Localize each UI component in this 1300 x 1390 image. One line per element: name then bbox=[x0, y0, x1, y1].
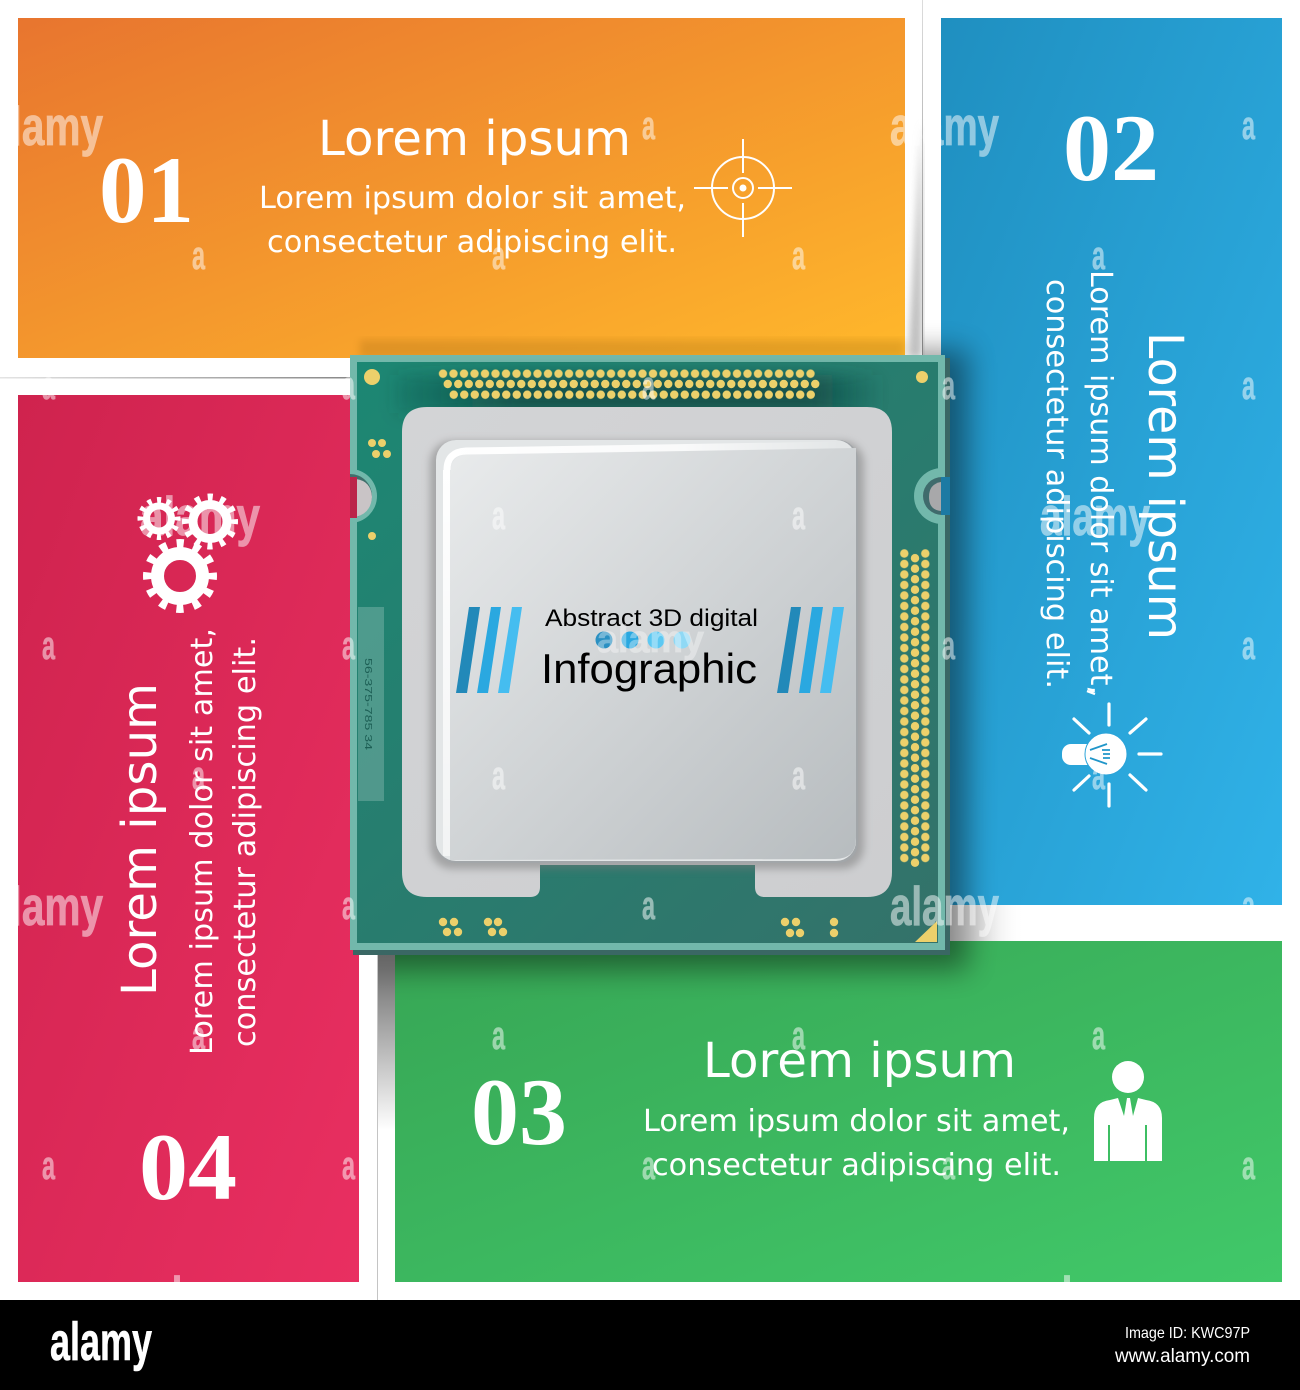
white sheet behind pink panel bbox=[0, 378, 377, 1300]
website: www.alamy.com bbox=[1114, 1346, 1250, 1367]
watermarks: a bbox=[492, 494, 505, 538]
number 01: 01 bbox=[99, 137, 194, 243]
body text 01: consectetur adipiscing elit. bbox=[267, 225, 677, 260]
watermarks: a bbox=[1092, 754, 1105, 798]
watermarks: a bbox=[1242, 104, 1255, 148]
watermarks: a bbox=[192, 754, 205, 798]
spec strip bbox=[358, 607, 384, 801]
watermarks: a bbox=[192, 1014, 205, 1058]
blue stripes right bbox=[777, 607, 844, 693]
watermarks: a bbox=[1242, 364, 1255, 408]
icon: light bulb bbox=[1062, 691, 1161, 806]
watermarks: a bbox=[792, 234, 805, 278]
white sheet behind orange panel bbox=[0, 0, 922, 377]
watermarks: a bbox=[942, 624, 955, 668]
watermarks: a bbox=[642, 884, 655, 928]
alamy logo: alamy bbox=[50, 1312, 152, 1372]
body text 03 bbox=[643, 1104, 1070, 1183]
centre label top: Abstract 3D digital bbox=[545, 605, 758, 632]
watermarks: a bbox=[342, 884, 355, 928]
watermarks: a bbox=[942, 364, 955, 408]
footer bar bbox=[0, 1300, 1300, 1390]
watermarks: a bbox=[342, 1144, 355, 1188]
watermarks: a bbox=[642, 1144, 655, 1188]
watermarks: a bbox=[942, 1144, 955, 1188]
body text 03: Lorem ipsum dolor sit amet, bbox=[643, 1104, 1070, 1139]
metal plate bbox=[436, 440, 858, 863]
number 03: 03 bbox=[471, 1059, 567, 1165]
number 02: 02 bbox=[1063, 95, 1159, 201]
body text 02: Lorem ipsum dolor sit amet, bbox=[1083, 270, 1118, 695]
heading 02: Lorem ipsum bbox=[1137, 332, 1193, 640]
watermarks: a bbox=[1092, 1014, 1105, 1058]
watermarks: alamy bbox=[1040, 485, 1150, 547]
image id: Image ID: KWC97P bbox=[1125, 1325, 1250, 1342]
watermarks: a bbox=[792, 1014, 805, 1058]
watermarks: a bbox=[1242, 884, 1255, 928]
heading 01: Lorem ipsum bbox=[318, 111, 631, 167]
watermarks: a bbox=[642, 364, 655, 408]
watermarks: alamy bbox=[890, 875, 999, 937]
watermarks: a bbox=[342, 624, 355, 668]
chip board bbox=[350, 355, 950, 955]
watermarks: a bbox=[492, 1014, 505, 1058]
body text 01: Lorem ipsum dolor sit amet, bbox=[259, 181, 686, 216]
number 04: 04 bbox=[139, 1114, 237, 1220]
watermarks: a bbox=[42, 1144, 55, 1188]
watermarks: a bbox=[492, 234, 505, 278]
watermarks: a bbox=[1242, 624, 1255, 668]
gold pins top bbox=[438, 369, 820, 400]
watermarks: a bbox=[1092, 234, 1105, 278]
gold contacts bbox=[364, 369, 937, 942]
body text 01 bbox=[259, 181, 686, 260]
watermarks: alamy bbox=[150, 1265, 260, 1327]
centre label main: Infographic bbox=[541, 645, 757, 692]
watermarks: a bbox=[492, 754, 505, 798]
watermarks: alamy bbox=[140, 485, 260, 547]
heading 03: Lorem ipsum bbox=[703, 1033, 1016, 1089]
body text 04: consectetur adipiscing elit. bbox=[228, 637, 263, 1047]
body text 04 bbox=[185, 628, 263, 1055]
body text 03: consectetur adipiscing elit. bbox=[652, 1148, 1061, 1183]
dark shading above carrier bbox=[395, 375, 885, 413]
watermarks: a bbox=[1242, 1144, 1255, 1188]
right notch bbox=[914, 468, 950, 524]
panel 04: pink bbox=[18, 395, 359, 1282]
panel 02: blue bbox=[941, 18, 1282, 905]
watermarks: a bbox=[42, 364, 55, 408]
watermarks: a bbox=[342, 364, 355, 408]
icon: businessman bbox=[1094, 1061, 1162, 1161]
watermarks: a bbox=[792, 494, 805, 538]
left notch bbox=[350, 469, 377, 523]
heading 04: Lorem ipsum bbox=[112, 683, 168, 996]
blue dots bbox=[596, 632, 690, 648]
watermarks: alamy bbox=[597, 619, 704, 661]
body text 02: consectetur adipiscing elit. bbox=[1039, 279, 1074, 689]
watermarks: a bbox=[792, 754, 805, 798]
gold pins right bbox=[899, 548, 930, 868]
CPU chip bbox=[350, 355, 950, 955]
spec strip: 56-375-785 34 bbox=[362, 658, 373, 751]
icon: target bbox=[694, 139, 792, 237]
panel 03: green bbox=[395, 941, 1282, 1282]
silver carrier bbox=[402, 407, 892, 897]
watermarks: alamy bbox=[1040, 1265, 1150, 1327]
watermarks: a bbox=[42, 624, 55, 668]
blue stripes left bbox=[456, 607, 522, 693]
watermarks: a bbox=[192, 234, 205, 278]
body text 02 bbox=[1039, 270, 1118, 695]
watermarks: alamy bbox=[890, 95, 999, 157]
icon: gears bbox=[141, 498, 234, 608]
body text 04: Lorem ipsum dolor sit amet, bbox=[185, 628, 220, 1055]
plate shadow bbox=[430, 441, 864, 869]
watermarks: a bbox=[642, 104, 655, 148]
chip cast shadow bbox=[350, 350, 968, 970]
panel 01: orange bbox=[18, 18, 905, 358]
